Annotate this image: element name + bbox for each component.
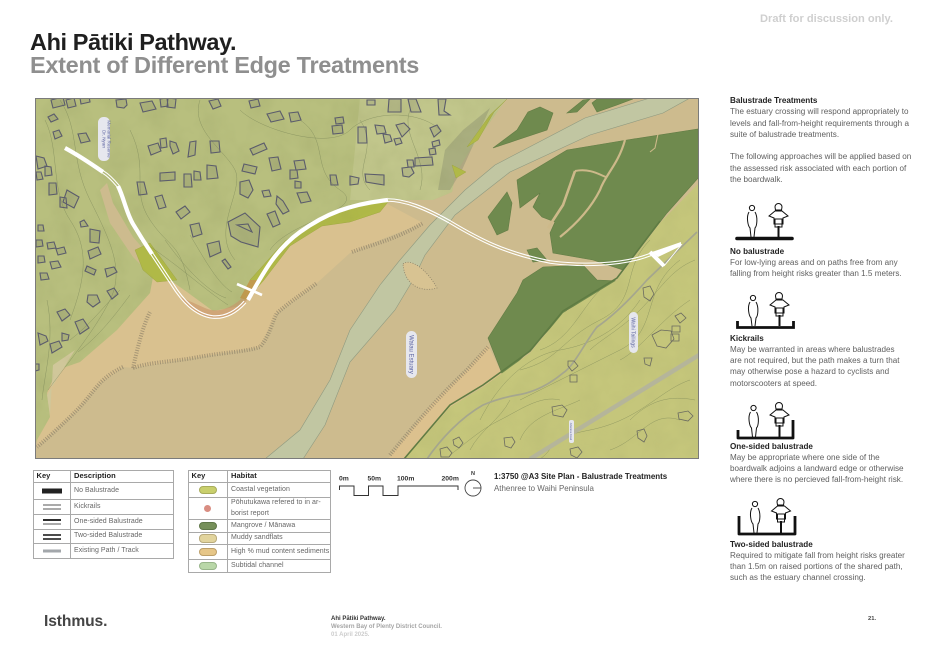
kickrails text: May be warranted in areas where balustrades (730, 345, 895, 354)
icon: two-sided balustrade (738, 498, 796, 536)
no balustrade text (730, 246, 902, 278)
map label: road: Athenree Road (569, 423, 573, 441)
key table: descriptions: No Balustrade (74, 487, 119, 494)
intro: balustrade treatments: suite of balustrade treatments. (730, 130, 839, 139)
map label: reserve: Memorial Reserve (106, 120, 112, 158)
mangrove areas (488, 99, 699, 376)
key table: habitat: Pōhutukawa refered to in ar- (231, 499, 321, 506)
kickrails text: may otherwise pose a hazard to cyclists and (730, 367, 889, 376)
no balustrade text: No balustrade (730, 246, 784, 256)
no balustrade text: falling from height risks greater than 1.5 meters. (730, 269, 902, 278)
key table: habitat (188, 470, 330, 573)
logo: Isthmus. (44, 613, 107, 630)
page number: 21. (868, 616, 876, 622)
one-sided balustrade text: boardwalk adjoins a landward edge or otherwise (730, 464, 904, 473)
key table: descriptions: Kickrails (74, 503, 101, 510)
north arrow (464, 471, 482, 496)
key table: habitat: Mangrove / Mānawa (231, 522, 295, 529)
upper left land (36, 99, 390, 442)
two-sided balustrade text (730, 540, 905, 582)
footer details (331, 616, 442, 638)
map label: reserve (98, 117, 112, 161)
one-sided balustrade text: May be appropriate where one side of the (730, 453, 880, 462)
intro: balustrade treatments: the boardwalk. (730, 175, 783, 184)
buildings (35, 96, 450, 371)
plan caption: Athenree to Waihi Peninsula (494, 484, 594, 492)
intro: balustrade treatments (730, 96, 911, 184)
intro: balustrade treatments: levels and fall-from-height requirements through a (730, 119, 909, 128)
key table: descriptions: Two-sided Balustrade (74, 532, 142, 539)
stippled mud edge (37, 223, 488, 455)
two-sided balustrade text: Two-sided balustrade (730, 540, 813, 548)
title: Ahi Pātiki Pathway. (30, 29, 236, 55)
tidal creeks (548, 134, 658, 237)
kickrails text (730, 334, 900, 388)
key table: habitat: Subtidal channel (231, 562, 284, 569)
scale bar: 50m (368, 476, 381, 482)
intro: balustrade treatments: the assessed risk associated with each portion of (730, 164, 906, 173)
one-sided balustrade text (730, 442, 904, 484)
intro: balustrade treatments: The estuary crossing will respond appropriately to (730, 107, 908, 116)
icon: no balustrade (735, 203, 794, 240)
icon: kickrails (736, 292, 795, 329)
map label: tailings (629, 312, 638, 353)
contour lines (42, 100, 695, 459)
slope shading (438, 108, 490, 190)
key table: descriptions: Existing Path / Track (74, 547, 139, 554)
kickrails text: motorscooters at speed. (730, 379, 817, 388)
map label: road (569, 420, 574, 443)
roads and tracks (530, 355, 699, 459)
coastal vegetation (135, 99, 507, 296)
key table: descriptions: Description (74, 471, 116, 480)
key table: habitat: Muddy sandflats (231, 534, 283, 541)
footer details: Western Bay of Plenty District Council. (331, 624, 442, 630)
plan caption: 1:3750 @A3 Site Plan - Balustrade Treatments (494, 472, 667, 481)
footer details: 01 April 2025. (331, 632, 369, 638)
no balustrade text: For low-lying areas and on paths free from any (730, 258, 898, 267)
mottled terrain texture (40, 110, 405, 386)
kickrails text: are not required, but the path makes a turn that (730, 356, 900, 365)
key table: habitat: Coastal vegetation (231, 486, 290, 493)
map label: reserve: Dr. Nyan (102, 130, 106, 148)
mud content sediment zone (35, 200, 423, 447)
key table: habitat: Key (192, 471, 205, 480)
north arrow: N (471, 471, 475, 477)
lower right land (405, 183, 699, 459)
two-sided balustrade text: Required to mitigate fall from height risks greater (730, 551, 905, 560)
site plan map (35, 98, 699, 459)
key table: descriptions: Key (36, 471, 50, 480)
scale bar: 200m (442, 476, 459, 482)
one-sided balustrade text: One-sided balustrade (730, 442, 813, 450)
title (30, 29, 419, 78)
estuary sand (35, 98, 699, 459)
key table: habitat: borist report (231, 510, 269, 516)
intro: balustrade treatments: The following approaches will be applied based on (730, 152, 911, 161)
buildings: east side (440, 286, 693, 458)
key table: descriptions (32, 470, 174, 559)
draft notice: Draft for discussion only. (760, 13, 893, 25)
map label: estuary: Waiau Estuary (408, 335, 414, 374)
key table: habitat: High % mud content sediments (231, 548, 329, 555)
two-sided balustrade text: than 1.5m on raised portions of the shared path, (730, 562, 903, 571)
map label: tailings: Waihi Tailings (630, 317, 636, 348)
intro: balustrade treatments: Balustrade Treatments (730, 96, 817, 105)
one-sided balustrade text: where there is no percieved fall-from-height risk. (730, 475, 903, 484)
subtidal channel (265, 98, 690, 459)
proposed pathway (64, 146, 682, 319)
key table: descriptions: One-sided Balustrade (74, 518, 143, 525)
icon: one-sided balustrade (736, 402, 794, 440)
scale bar (339, 476, 459, 496)
two-sided balustrade text: such as the estuary channel crossing. (730, 573, 866, 582)
title: Extent of Different Edge Treatments (30, 52, 419, 78)
map label: estuary (406, 331, 417, 378)
scale bar: 100m (397, 476, 414, 482)
scale bar: 0m (339, 476, 349, 482)
plan caption (494, 472, 667, 492)
kickrails text: Kickrails (730, 334, 764, 342)
footer details: Ahi Pātiki Pathway. (331, 616, 386, 622)
key table: habitat: Habitat (231, 471, 257, 480)
